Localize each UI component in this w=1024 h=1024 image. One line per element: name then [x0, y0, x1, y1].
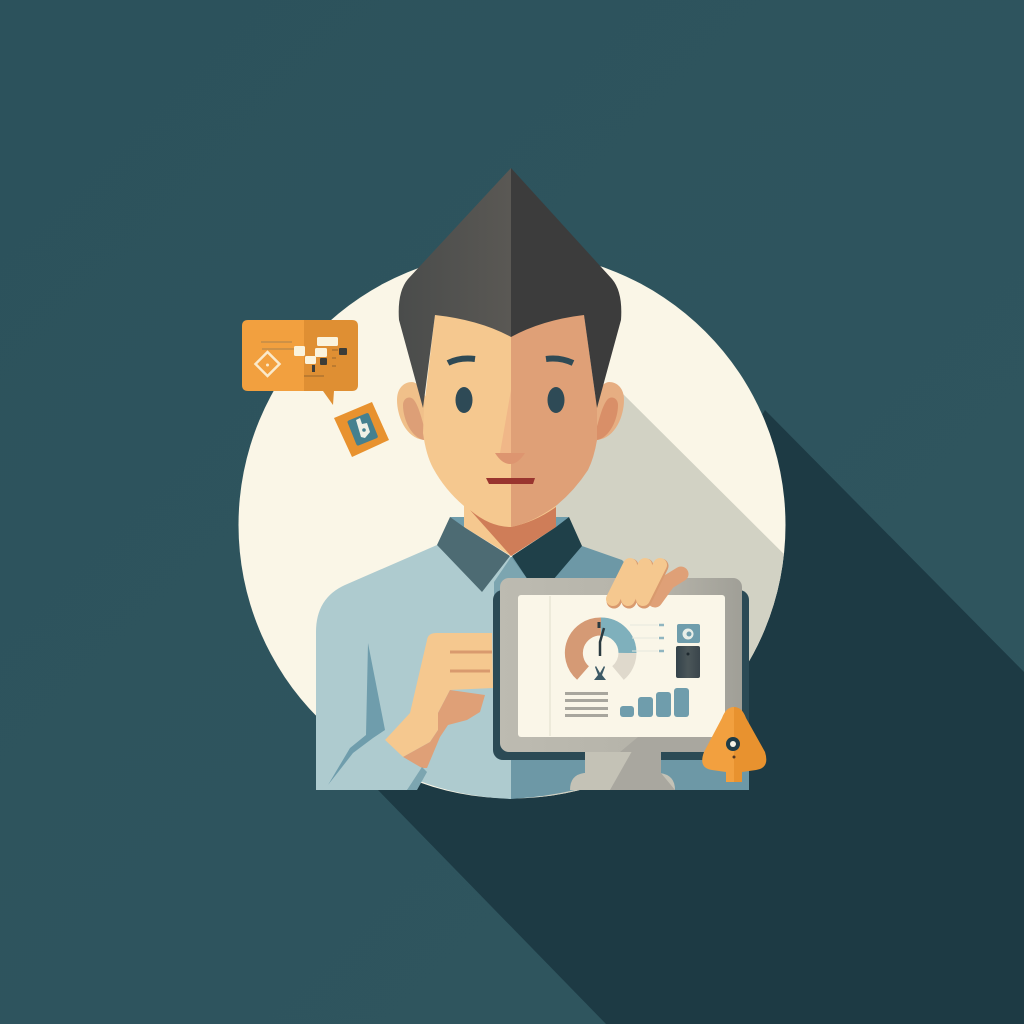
bubble lines — [261, 342, 295, 349]
face — [423, 310, 597, 527]
shirt — [316, 545, 749, 799]
gauge base — [594, 666, 606, 680]
eyebrows — [448, 358, 573, 363]
shadow on circle — [540, 383, 800, 800]
hair — [399, 168, 621, 408]
warning icon — [702, 707, 766, 782]
diamond icon — [255, 352, 280, 376]
person — [316, 168, 749, 799]
left ear — [397, 382, 430, 440]
icon tile — [677, 624, 700, 643]
background circle — [238, 252, 786, 798]
bar chart — [620, 688, 689, 717]
flow chart — [294, 337, 347, 376]
dark device tile — [676, 646, 700, 678]
gauge — [574, 622, 628, 680]
arm fold — [328, 643, 385, 785]
eyes — [456, 387, 564, 413]
left hand — [385, 633, 493, 768]
screen divider — [550, 596, 551, 736]
monitor bezel — [500, 578, 742, 752]
top hand — [613, 565, 681, 601]
needle — [599, 622, 604, 656]
gauge legend lines — [630, 625, 664, 651]
illustration — [238, 168, 1024, 1024]
chin shade — [620, 737, 742, 752]
monitor — [493, 578, 749, 790]
collar — [437, 517, 582, 592]
cuff — [316, 737, 427, 790]
neck — [464, 500, 556, 556]
screen — [518, 595, 725, 737]
nose — [495, 390, 525, 464]
placket — [494, 557, 530, 600]
inner collar — [450, 517, 569, 530]
speech bubble — [242, 320, 358, 405]
text lines — [565, 692, 608, 717]
tilted badge — [334, 402, 389, 457]
mouth — [486, 478, 535, 484]
long shadow — [378, 410, 1024, 1024]
monitor stand — [570, 737, 675, 790]
monitor shadow — [493, 590, 749, 760]
right ear — [591, 382, 624, 440]
